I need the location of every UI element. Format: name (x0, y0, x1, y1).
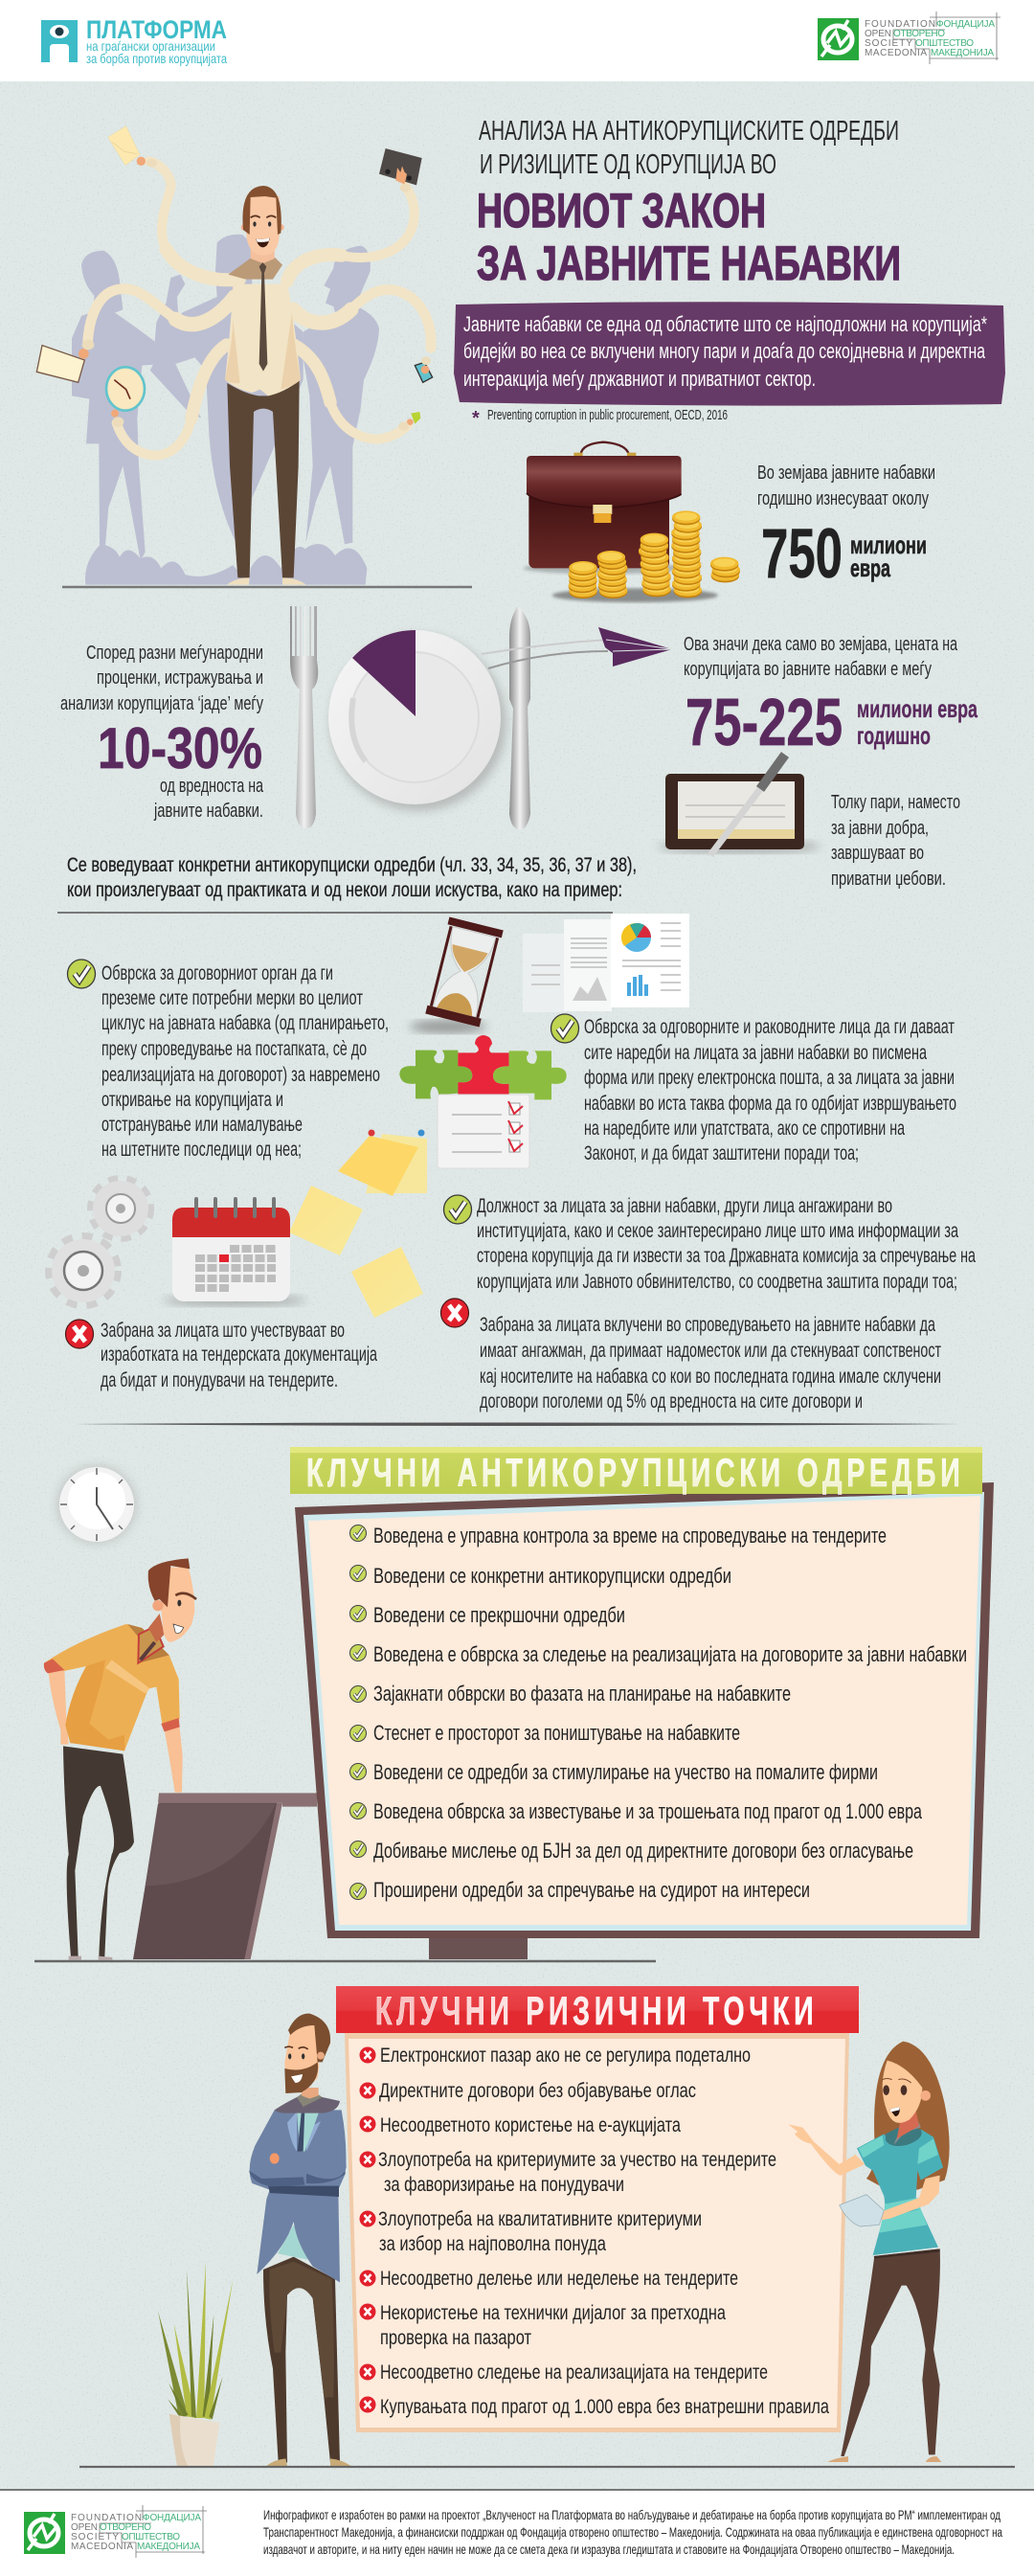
risk list (360, 2045, 829, 2418)
stat: 75-225 million euro (684, 634, 978, 759)
item: duty to report corruption (444, 1195, 976, 1293)
footer logo (24, 2505, 207, 2558)
logo: Platforma: на граѓански организации (86, 38, 215, 54)
item: obligation of contracting authority (67, 960, 389, 1161)
item: obligation of contracting authority: преку спроведување на постапката, сè до (101, 1038, 367, 1060)
torso and head (227, 380, 300, 577)
risk list: Несоодветното користење на е-аукцијата (380, 2114, 681, 2136)
illustration: puzzle pieces (399, 1035, 567, 1099)
logo: Platforma: ПЛАТФОРМА (86, 15, 227, 44)
stat: 75-225 million euro: годишно (857, 721, 931, 750)
illustration: calendar (163, 1199, 306, 1306)
illustration: potted plant (158, 2262, 233, 2467)
illustration: notepad with checklist (438, 1095, 529, 1168)
text: 10-30% of procurement value: проценки, истражувања и (97, 667, 263, 689)
arms (88, 161, 431, 456)
text: 10-30% of procurement value: Според разни меѓународни (86, 643, 263, 664)
intro callout panel (454, 302, 1005, 406)
illustration: hourglass (410, 917, 504, 1033)
illustration: gears (49, 1179, 150, 1305)
risk list: Директните договори без објавување оглас (379, 2080, 696, 2102)
provisions list: Проширени одредби за спречување на судирот на интереси (373, 1878, 810, 1902)
envelope (108, 126, 157, 167)
footer band (0, 2489, 1034, 2576)
panel: key anti-corruption provisions (290, 1447, 994, 1938)
risk list: Несоодветно делење или неделење на тендерите (380, 2268, 738, 2290)
item: ban on engagement of procurement persons: договори поголеми од 5% од вредноста на сите договори и (480, 1390, 863, 1412)
text: public money into private pockets (831, 792, 960, 890)
fork (290, 606, 318, 828)
footnote: Preventing corruption in public procurement, OECD, 2016 (487, 407, 728, 423)
section intro heading: Се воведуваат конкретни антикорупциски одредби (чл. 33, 34, 35, 36, 37 и 38), (67, 854, 637, 876)
logo: Platforma (41, 15, 227, 66)
title: НОВИОТ ЗАКОН (477, 184, 766, 237)
item: obligation of contracting authority: на штетните последици од неа; (101, 1139, 302, 1161)
item: ban on engagement of procurement persons (440, 1299, 941, 1412)
text: 10-30% of procurement value: 10-30% (98, 716, 262, 780)
provisions list: Воведени се конкретни антикорупциски одредби (373, 1564, 731, 1588)
item: obligation of contracting authority: Обврска за договорниот орган да ги (101, 962, 333, 984)
stat: 75-225 million euro: корупцијата во јавните набавки е меѓу (684, 659, 932, 680)
silhouettes behind (72, 235, 379, 585)
illustration: man leaning on desk (44, 1558, 196, 1960)
risk list: Некористење на технички дијалог за претходна (380, 2302, 726, 2324)
stat: 750 million euro: годишно изнесуваат околу (757, 488, 929, 509)
section intro heading (67, 854, 637, 901)
item: ban on tender document drafters: изработката на тендерската документација (101, 1344, 377, 1366)
footnote (472, 407, 728, 429)
provisions list (350, 1524, 967, 1902)
illustration: checkbook and pen (658, 755, 820, 855)
text: 10-30% of procurement value: од вредноста на (160, 776, 264, 797)
item: obligation of responsible persons: Законот, и да бидат заштитени поради тоа; (584, 1142, 859, 1164)
stat: 75-225 million euro: 75-225 (686, 685, 843, 759)
stat: 750 million euro: 750 (761, 515, 843, 593)
footnote: * (472, 408, 480, 429)
header band (0, 0, 1034, 81)
title (477, 116, 901, 290)
illustration: man with many arms (36, 126, 433, 585)
illustration: briefcase and coins (524, 442, 740, 602)
knife (509, 606, 530, 829)
text: public money into private pockets: завршуваат во (831, 843, 924, 864)
risk list: за фаворизирање на понудувачи (384, 2174, 624, 2196)
text: 10-30% of procurement value: анализи корупцијата ‘јаде’ меѓу (60, 693, 263, 714)
provisions list: Воведени се прекршочни одредби (373, 1603, 625, 1627)
clipboard (36, 340, 94, 382)
risk list: Купувањата под прагот од 1.000 евра без внатрешни правила (380, 2396, 829, 2418)
risk list: Електронскиот пазар ако не се регулира подетално (380, 2045, 751, 2067)
text: 10-30% of procurement value: јавните набавки. (153, 801, 263, 822)
risk list: проверка на пазарот (380, 2327, 531, 2349)
provisions list: Зајакнати обврски во фазата на планирање на набавките (373, 1682, 791, 1706)
provisions list: Стеснет е просторот за поништување на набавките (373, 1721, 740, 1745)
item: ban on tender document drafters (65, 1320, 377, 1391)
illustration: wall clock (56, 1465, 137, 1544)
title: ЗА ЈАВНИТЕ НАБАВКИ (477, 237, 901, 290)
tablet (379, 148, 422, 192)
stat: 750 million euro: евра (850, 554, 890, 582)
banner heading: КЛУЧНИ РИЗИЧНИ ТОЧКИ (375, 1987, 814, 2033)
item: ban on tender document drafters: да бидат и понудувачи на тендерите. (101, 1369, 338, 1391)
item: obligation of contracting authority: циклус на јавната набавка (од планирањето, (101, 1012, 389, 1034)
section intro heading: кои произлегуваат од практиката и од некои лоши искуства, како на пример: (67, 879, 622, 901)
stat: 750 million euro (757, 463, 935, 593)
logo: Platforma: за борба против корупцијата (86, 51, 227, 66)
pie segment (352, 630, 416, 716)
banner heading: КЛУЧНИ АНТИКОРУПЦИСКИ ОДРЕДБИ (306, 1449, 960, 1495)
text: 10-30% of procurement value (60, 643, 264, 822)
logo: Foundation Open Society Macedonia (818, 11, 1000, 64)
illustration: plate with pie share, fork and knife (290, 606, 530, 829)
illustration: bearded man with crossed arms (249, 2014, 351, 2466)
item: ban on tender document drafters: Забрана за лицата што учествуваат во (101, 1320, 345, 1342)
stat: 750 million euro: Во земјава јавните набавки (757, 463, 935, 484)
intro callout panel: интеракција меѓу државниот и приватниот сектор. (463, 367, 816, 391)
clock held in hand (106, 367, 145, 427)
illustration: woman pointing (788, 2042, 950, 2462)
text: public money into private pockets: за јавни добра, (831, 818, 929, 839)
phone (415, 356, 433, 382)
risk list: Несоодветно следење на реализацијата на тендерите (380, 2361, 768, 2384)
item: obligation of responsible persons (551, 1014, 956, 1164)
item: obligation of contracting authority: отстранување или намалување (101, 1114, 303, 1136)
illustration: desk (133, 1793, 528, 1959)
text: public money into private pockets: приватни џебови. (831, 869, 946, 890)
risk list: Злоупотреба на квалитативните критериуми (378, 2208, 702, 2230)
item: obligation of contracting authority: реализацијата на договорот) за навремено (101, 1064, 380, 1086)
panel: key risk points (336, 1986, 859, 2432)
footer disclaimer text (263, 2507, 1002, 2557)
item: obligation of contracting authority: преземе сите потребни мерки во целиот (101, 987, 363, 1009)
card (398, 412, 420, 431)
stat: 75-225 million euro: милиони евра (857, 694, 978, 723)
risk list: Злоупотреба на критериумите за учество на тендерите (378, 2149, 776, 2171)
stat: 750 million euro: милиони (850, 531, 927, 559)
illustration: report documents with charts (523, 914, 689, 1012)
title: И РИЗИЦИТЕ ОД КОРУПЦИЈА ВО (480, 149, 776, 180)
text: public money into private pockets: Толку пари, наместо (831, 792, 960, 813)
illustration: sticky notes (289, 1130, 427, 1318)
arrow: paper plane (482, 627, 672, 668)
coins (569, 510, 740, 599)
item: obligation of contracting authority: откривање на корупцијата и (101, 1089, 283, 1111)
risk list: за избор на најповолна понуда (379, 2233, 606, 2255)
